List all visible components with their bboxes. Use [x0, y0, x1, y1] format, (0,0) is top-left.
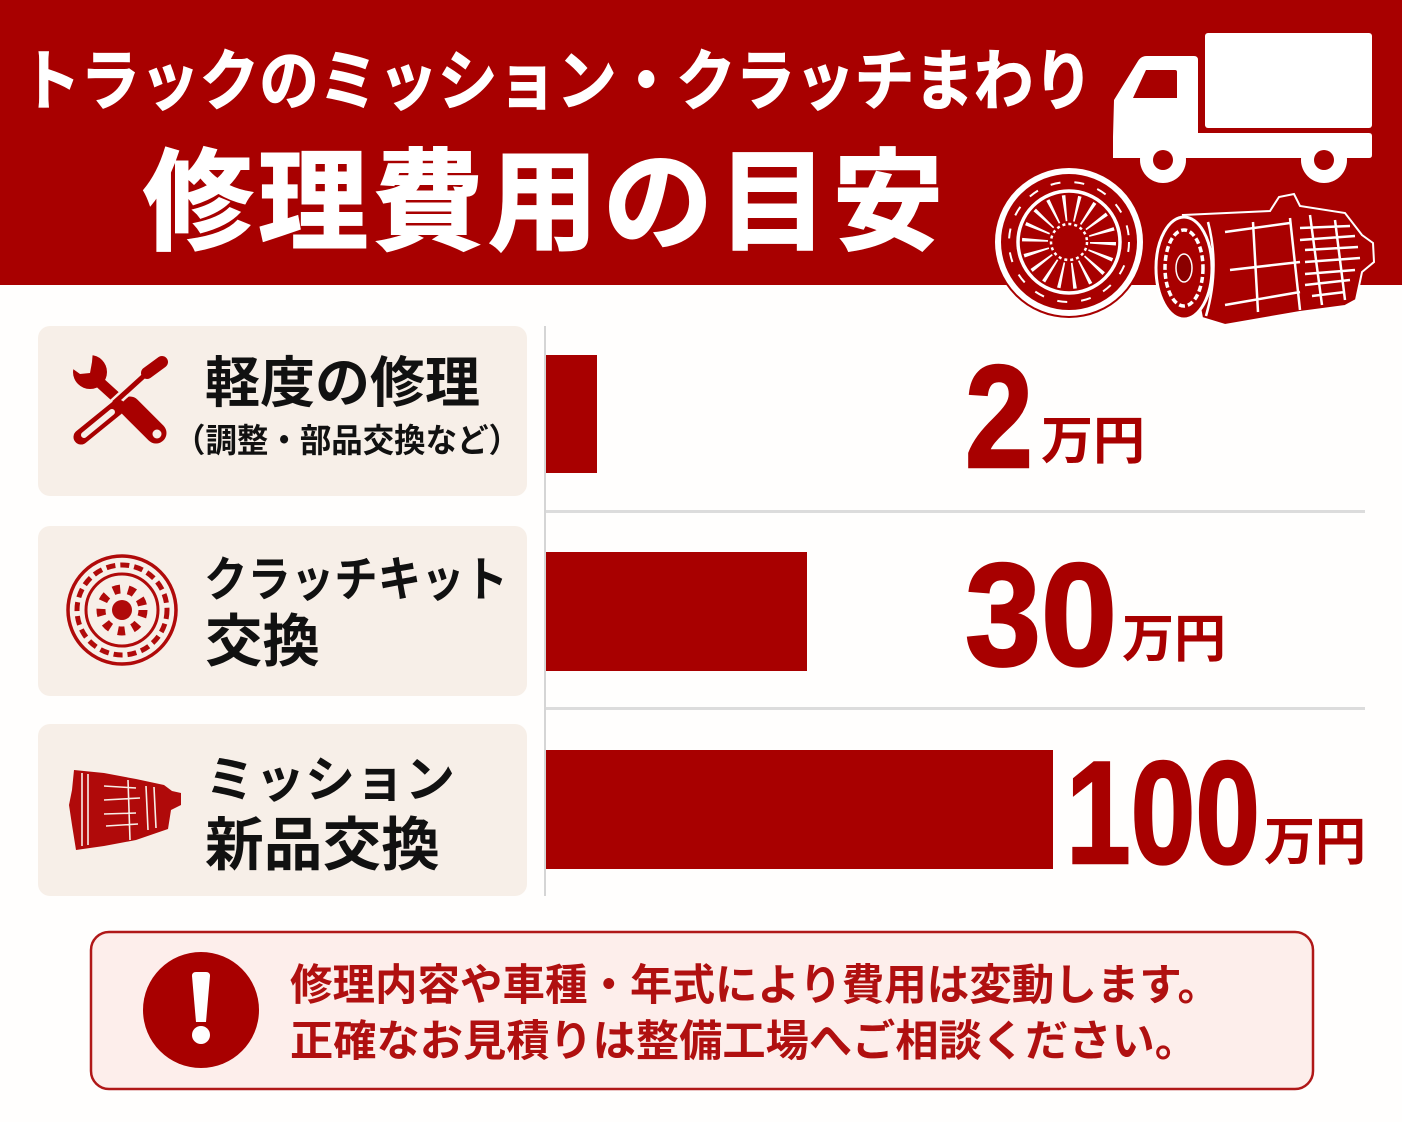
icon: clutch — [68, 556, 176, 664]
icon: wrench and screwdriver — [66, 350, 162, 438]
bar: 100万円 — [546, 750, 1053, 869]
value: 100万円: 万円 — [1264, 814, 1366, 872]
value: 2万円: 2 — [965, 335, 1033, 498]
title: line 1: トラックのミッション・クラッチまわり — [21, 44, 1093, 118]
sub-label: adjustment and parts: （調整・部品交換など） — [174, 422, 520, 459]
icon: exclamation — [143, 952, 259, 1068]
icon: clutch disc — [993, 166, 1145, 318]
chart axis — [544, 326, 546, 896]
heading: transmission: ミッション — [205, 752, 455, 808]
value: 2万円: 万円 — [1041, 413, 1145, 471]
notice text line 1: 修理内容や車種・年式により費用は変動します。 — [290, 962, 1220, 1010]
icon: transmission small — [69, 770, 181, 850]
heading: light repair: 軽度の修理 — [205, 352, 480, 414]
callout: notice — [91, 932, 1313, 1089]
title: line 2: 修理費用の目安 — [143, 142, 943, 265]
panel: clutch kit label — [38, 526, 527, 696]
value: 30万円: 万円 — [1122, 611, 1226, 669]
icon: transmission — [1156, 194, 1374, 325]
heading: replacement: 交換 — [205, 610, 320, 674]
panel: new transmission label — [38, 724, 527, 896]
value: 30万円: 30 — [965, 533, 1117, 696]
bar: 30万円 — [546, 552, 807, 671]
value: 30万円 — [965, 533, 1226, 696]
header band — [0, 0, 1402, 285]
value: 100万円: 100 — [1066, 731, 1260, 894]
heading: new replacement: 新品交換 — [205, 813, 440, 878]
panel: light repair label — [38, 326, 527, 496]
heading: clutch kit: クラッチキット — [204, 554, 508, 607]
icon: truck — [1113, 33, 1372, 183]
value: 2万円 — [965, 335, 1145, 498]
notice text line 2: 正確なお見積りは整備工場へご相談ください。 — [290, 1018, 1198, 1066]
bar: 2万円 — [546, 355, 597, 473]
